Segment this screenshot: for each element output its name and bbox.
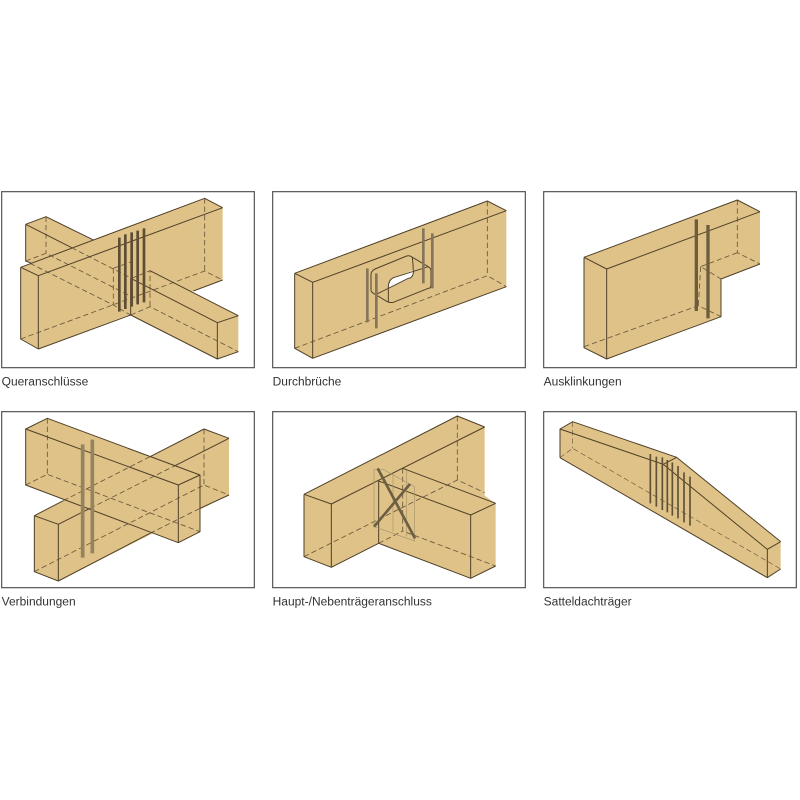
crossed screws bbox=[374, 468, 415, 538]
reinforcement rods bbox=[650, 454, 690, 526]
beam: crossing timber and main beam bbox=[21, 198, 238, 359]
reinforcement rods bbox=[119, 228, 144, 312]
beam with opening bbox=[295, 201, 506, 358]
panel: Satteldachträger bbox=[544, 412, 796, 609]
crossing beams bbox=[26, 418, 229, 581]
panel: Haupt-/Nebenträgeranschluss bbox=[273, 412, 525, 609]
main and secondary beams bbox=[304, 416, 496, 578]
pitched cambered beam bbox=[560, 422, 781, 578]
fixing plate outlines bbox=[374, 469, 415, 541]
panel: Queranschlüsse bbox=[2, 192, 254, 389]
panel: Verbindungen bbox=[2, 412, 254, 609]
panel: Ausklinkungen bbox=[544, 192, 796, 389]
reinforcement rods bbox=[696, 219, 708, 318]
label: Queranschlüsse bbox=[2, 375, 89, 389]
label: Haupt-/Nebenträgeranschluss bbox=[273, 595, 432, 609]
label: Durchbrüche bbox=[273, 375, 342, 389]
panel: Durchbrüche bbox=[273, 192, 525, 389]
reinforcement rods bbox=[367, 228, 432, 328]
label: Ausklinkungen bbox=[544, 375, 622, 389]
reinforcement rods bbox=[83, 440, 92, 558]
notched beam bbox=[584, 200, 760, 359]
label: Verbindungen bbox=[2, 595, 76, 609]
label: Satteldachträger bbox=[544, 595, 632, 609]
opening bbox=[388, 269, 413, 288]
